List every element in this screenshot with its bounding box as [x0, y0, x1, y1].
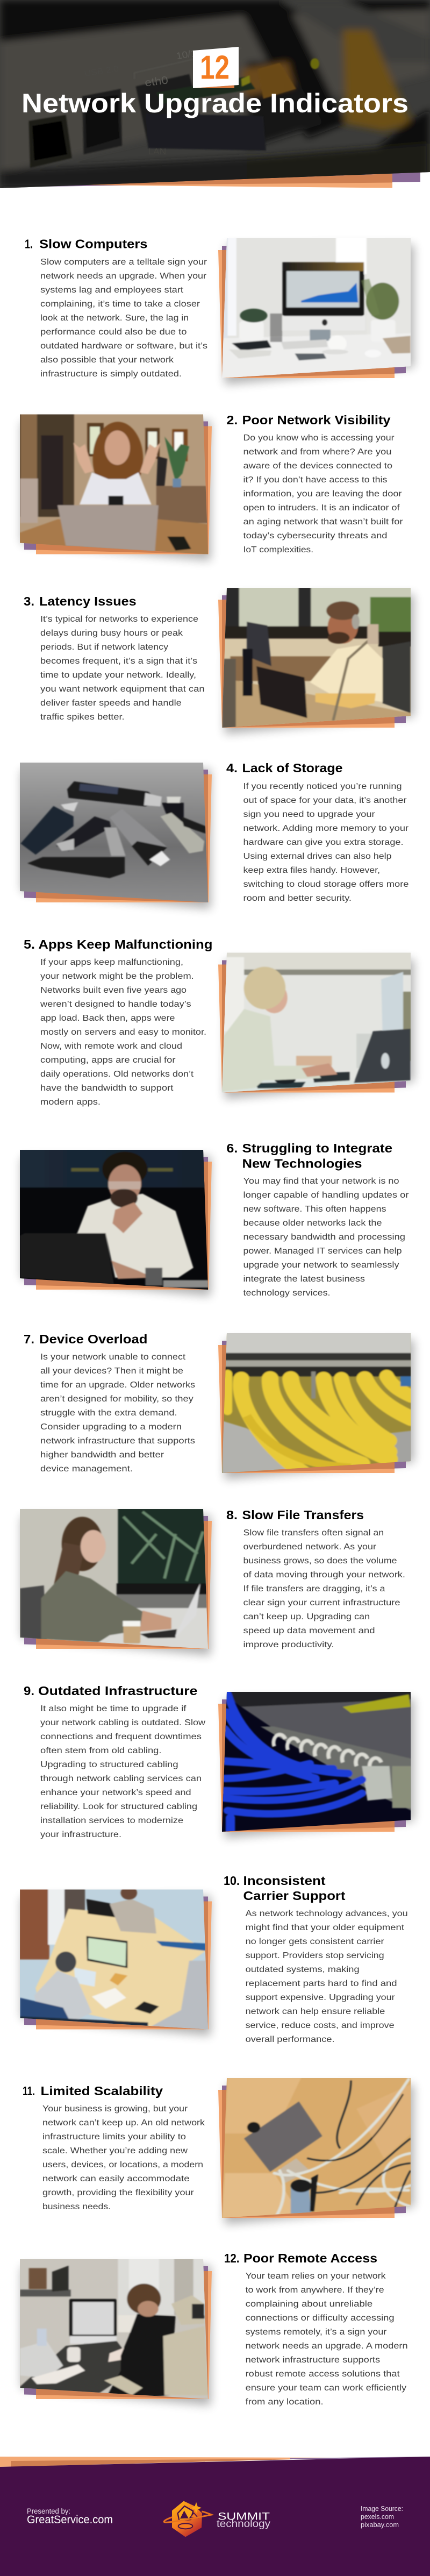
body text 12: ensure your team can work efficiently: [246, 2383, 406, 2393]
logo: Summit Technology: [164, 2501, 271, 2537]
body text 12: systems remotely, it’s a sign your: [246, 2328, 386, 2337]
body text 3: becomes frequent, it’s a sign that it’s: [40, 657, 197, 666]
body text 3: It’s typical for networks to experience: [40, 615, 198, 624]
heading 3: Latency Issues: [39, 594, 137, 608]
body text 1: Slow computers are a telltale sign your: [40, 258, 207, 267]
logo wordmark: technology: [217, 2518, 271, 2530]
section 10: Inconsistent Carrier Support: [19, 1874, 408, 2044]
body text 5: Now, with remote work and cloud: [40, 1042, 182, 1051]
heading 8: 8.: [226, 1508, 238, 1522]
body text 9: your network cabling is outdated. Slow: [40, 1718, 206, 1727]
section 4: Lack of Storage: [19, 761, 409, 909]
body text 1: complaining, it’s time to take a closer: [40, 300, 200, 309]
body text 12: Your team relies on your network: [246, 2272, 386, 2281]
body text 8: overburdened network. As your: [243, 1542, 376, 1552]
body text 10: overall performance.: [246, 2035, 335, 2044]
heading 10: Inconsistent: [243, 1874, 326, 1888]
body text 6: integrate the latest business: [243, 1275, 365, 1284]
body text 9: installation services to modernize: [40, 1816, 183, 1825]
body text 7: Is your network unable to connect: [40, 1353, 186, 1362]
number badge: 12: [200, 49, 230, 86]
image source credits: [361, 2504, 403, 2529]
image frame 8: [19, 1508, 212, 1655]
body text 4: Using external drives can also help: [243, 852, 391, 861]
body text 1: performance could also be due to: [40, 328, 187, 337]
image source credits: pexels.com: [361, 2513, 394, 2521]
heading 11: Limited Scalability: [41, 2084, 163, 2098]
heading 7: 7.: [24, 1332, 34, 1346]
body text 6: [243, 1177, 408, 1298]
body text 8: Slow file transfers often signal an: [243, 1528, 384, 1538]
heading 9: 9.: [24, 1684, 34, 1698]
image frame 6: [19, 1148, 212, 1296]
photo: blue network cables in switch: [219, 1691, 411, 1835]
section 12: Poor Remote Access: [19, 2251, 408, 2407]
body text 1: [40, 258, 207, 379]
body text 1: infrastructure is simply outdated.: [40, 369, 182, 379]
body text 9: reliability. Look for structured cabling: [40, 1802, 197, 1811]
heading 4: Lack of Storage: [242, 761, 343, 775]
heading 6: Struggling to Integrate: [242, 1141, 392, 1155]
section 1: Slow Computers: [25, 237, 414, 385]
body text 12: [246, 2272, 408, 2407]
image source credits: pixabay.com: [361, 2521, 399, 2529]
body text 1: outdated hardware or software, but it’s: [40, 341, 207, 351]
body text 10: replacement parts hard to find and: [246, 1979, 397, 1988]
body text 9: [40, 1704, 206, 1839]
body text 1: also possible that your network: [40, 355, 174, 365]
heading 12: 12.: [224, 2251, 240, 2265]
heading 12: Poor Remote Access: [243, 2251, 377, 2265]
body text 1: look at the network. Sure, the lag in: [40, 314, 189, 323]
body text 5: modern apps.: [40, 1098, 101, 1107]
body text 7: device management.: [40, 1464, 133, 1474]
image frame 2: [19, 413, 212, 560]
body text 3: delays during busy hours or peak: [40, 629, 183, 638]
section 7: Device Overload: [24, 1332, 414, 1479]
body text 6: upgrade your network to seamlessly: [243, 1261, 399, 1270]
body text 8: speed up data movement and: [243, 1626, 375, 1635]
body text 4: out of space for your data, it’s another: [243, 796, 406, 805]
body text 6: You may find that your network is no: [243, 1177, 399, 1186]
body text 8: of data moving through your network.: [243, 1570, 405, 1579]
body text 4: sign you need to upgrade your: [243, 810, 375, 819]
body text 9: your infrastructure.: [40, 1830, 121, 1839]
heading 2: 2.: [226, 413, 238, 427]
body text 11: business needs.: [42, 2202, 111, 2211]
logo wordmark: [217, 2511, 271, 2530]
body text 12: network infrastructure supports: [246, 2356, 380, 2365]
heading 11: 11.: [23, 2084, 35, 2098]
body text 11: [42, 2104, 205, 2211]
body text 3: traffic spikes better.: [40, 713, 125, 722]
photo: frustrated woman at laptop: [19, 413, 210, 555]
image frame 3: [218, 587, 414, 734]
body text 10: outdated systems, making: [246, 1965, 360, 1974]
body text 6: because older networks lack the: [243, 1219, 382, 1228]
body text 11: Your business is growing, but your: [42, 2104, 188, 2114]
body text 11: network can’t keep up. An old network: [42, 2118, 205, 2127]
body text 10: support expensive. Upgrading your: [246, 1993, 395, 2002]
body text 1: systems lag and employees start: [40, 286, 184, 295]
body text 12: connections or difficulty accessing: [246, 2314, 395, 2323]
header photo: router ports and cables: 10/1: [175, 47, 197, 61]
photo: man at iMac in home office: [19, 2258, 210, 2401]
body text 3: [40, 615, 205, 722]
heading 4: 4.: [226, 761, 238, 775]
body text 9: often stem from old cabling.: [40, 1746, 161, 1755]
body text 2: IoT complexities.: [243, 545, 313, 554]
body text 2: aware of the devices connected to: [243, 461, 392, 471]
body text 11: network can easily accommodate: [42, 2174, 189, 2183]
body text 5: If your apps keep malfunctioning,: [40, 958, 183, 967]
title: Network Upgrade Indicators: [22, 88, 408, 118]
body text 10: network can help ensure reliable: [246, 2007, 385, 2016]
heading 10: Carrier Support: [243, 1889, 346, 1903]
body text 7: higher bandwidth and better: [40, 1450, 164, 1460]
section 5: Apps Keep Malfunctioning: [24, 937, 414, 1107]
header accent bands: [43, 172, 420, 188]
presented by: [27, 2507, 113, 2526]
body text 6: new software. This often happens: [243, 1205, 386, 1214]
body text 5: your network might be the problem.: [40, 972, 194, 981]
image frame 12: [19, 2258, 212, 2406]
heading 10: [224, 1874, 346, 1903]
body text 8: clear sign your current infrastructure: [243, 1598, 400, 1607]
image frame 4: [19, 761, 212, 909]
section 3: Latency Issues: [24, 587, 414, 734]
body text 9: enhance your network’s speed and: [40, 1788, 191, 1797]
photo: desktop computer on white desk: [219, 237, 411, 380]
body text 3: deliver faster speeds and handle: [40, 699, 182, 708]
section 6: Struggling to Integrate New Technologies: [19, 1141, 409, 1298]
body text 11: infrastructure limits your ability to: [42, 2132, 186, 2141]
body text 4: network. Adding more memory to your: [243, 824, 408, 833]
body text 5: weren’t designed to handle today’s: [40, 1000, 191, 1009]
body text 12: network needs an upgrade. A modern: [246, 2342, 408, 2351]
heading 5: 5.: [24, 937, 35, 951]
presented by: Presented by:: [27, 2507, 70, 2515]
body text 12: from any location.: [246, 2397, 324, 2407]
image source credits: Image Source:: [361, 2504, 403, 2513]
photo: woman working at computer: [219, 951, 411, 1094]
body text 9: connections and frequent downtimes: [40, 1732, 202, 1741]
image frame 5: [218, 951, 414, 1099]
body text 8: If file transfers are dragging, it’s a: [243, 1584, 385, 1593]
header photo: router ports and cables: [0, 0, 430, 188]
heading 6: 6.: [226, 1141, 238, 1155]
heading 5: Apps Keep Malfunctioning: [38, 937, 212, 951]
body text 2: information, you are leaving the door: [243, 489, 402, 499]
footer accent bands: [0, 2457, 430, 2467]
photo: two colleagues working at shared desk, overhead view: [19, 1886, 210, 2031]
body text 8: improve productivity.: [243, 1640, 334, 1649]
body text 10: support. Providers stop servicing: [246, 1951, 384, 1960]
body text 9: through network cabling services can: [40, 1774, 202, 1783]
body text 11: growth, providing the flexibility your: [42, 2188, 194, 2197]
photo: yellow network cables in patch panel: [219, 1332, 411, 1475]
heading 6: [226, 1141, 392, 1170]
body text 9: Upgrading to structured cabling: [40, 1760, 178, 1769]
logo icon: [164, 2501, 211, 2537]
body text 5: Networks built even five years ago: [40, 986, 187, 995]
section 2: Poor Network Visibility: [19, 413, 403, 560]
body text 10: service, reduce costs, and improve: [246, 2021, 395, 2030]
body text 6: longer capable of handling updates or: [243, 1191, 408, 1200]
body text 5: mostly on servers and easy to monitor.: [40, 1028, 206, 1037]
body text 4: If you recently noticed you’re running: [243, 782, 402, 791]
heading 6: New Technologies: [242, 1156, 362, 1170]
header photo: router ports and cables: eth0: [144, 74, 169, 89]
body text 8: business grows, so does the volume: [243, 1556, 397, 1565]
body text 4: [243, 782, 408, 903]
footer panel: [0, 2457, 430, 2576]
body text 8: [243, 1528, 405, 1649]
image frame 11: [218, 2077, 414, 2224]
body text 6: technology services.: [243, 1289, 330, 1298]
body text 5: app load. Back then, apps were: [40, 1014, 175, 1023]
body text 2: today’s cybersecurity threats and: [243, 531, 387, 540]
section 9: Outdated Infrastructure: [24, 1684, 414, 1839]
body text 5: daily operations. Old networks don’t: [40, 1070, 194, 1079]
body text 10: As network technology advances, you: [246, 1909, 408, 1918]
body text 2: network and from where? Are you: [243, 447, 391, 457]
body text 7: struggle with the extra demand.: [40, 1408, 177, 1418]
image frame 10: [19, 1886, 212, 2036]
body text 11: scale. Whether you’re adding new: [42, 2146, 188, 2155]
body text 3: periods. But if network latency: [40, 643, 168, 652]
body text 4: room and better security.: [243, 894, 352, 903]
body text 6: necessary bandwidth and processing: [243, 1233, 405, 1242]
body text 4: keep extra files handy. However,: [243, 866, 380, 875]
body text 7: Consider upgrading to a modern: [40, 1422, 182, 1432]
presented by: GreatService.com: [27, 2514, 113, 2526]
body text 3: time to update your network. Ideally,: [40, 671, 196, 680]
header photo: router ports and cables: USB 2.0: [84, 64, 120, 79]
heading 9: Outdated Infrastructure: [38, 1684, 197, 1698]
body text 5: [40, 958, 206, 1107]
heading 1: Slow Computers: [39, 237, 147, 251]
heading 2: Poor Network Visibility: [242, 413, 390, 427]
body text 7: network infrastructure that supports: [40, 1436, 195, 1446]
heading 3: 3.: [24, 594, 34, 608]
body text 2: it? If you don’t have access to this: [243, 475, 388, 485]
body text 12: robust remote access solutions that: [246, 2369, 400, 2379]
body text 5: have the bandwidth to support: [40, 1084, 174, 1093]
body text 4: hardware can give you extra storage.: [243, 838, 403, 847]
body text 7: [40, 1353, 195, 1474]
logo wordmark: SUMMIT: [218, 2511, 270, 2522]
photo: USB flash drives: [19, 761, 210, 904]
body text 12: complaining about unreliable: [246, 2300, 372, 2309]
section 8: Slow File Transfers: [19, 1508, 405, 1655]
body text 1: network needs an upgrade. When your: [40, 272, 206, 281]
body text 9: It also might be time to upgrade if: [40, 1704, 187, 1713]
body text 2: Do you know who is accessing your: [243, 433, 395, 443]
photo: man with headphones at desk: [219, 587, 411, 730]
body text 4: switching to cloud storage offers more: [243, 880, 408, 889]
body text 3: you want network equipment that can: [40, 685, 205, 694]
image frame 1: [218, 237, 414, 385]
photo: man thinking at laptop: [19, 1148, 210, 1291]
photo: network switch with cables on wood floor: [219, 2077, 411, 2220]
body text 10: no longer gets consistent carrier: [246, 1937, 384, 1946]
body text 6: power. Managed IT services can help: [243, 1247, 402, 1256]
body text 12: to work from anywhere. If they’re: [246, 2286, 384, 2295]
body text 10: [246, 1909, 408, 2044]
body text 5: computing, apps are crucial for: [40, 1056, 175, 1065]
heading 10: 10.: [224, 1874, 240, 1888]
image frame 9: [218, 1691, 414, 1838]
body text 8: can’t keep up. Upgrading can: [243, 1612, 370, 1621]
section 11: Limited Scalability: [23, 2077, 414, 2224]
image frame 7: [218, 1332, 414, 1479]
body text 2: open to intruders. It is an indicator of: [243, 503, 400, 513]
body text 11: users, devices, or locations, a modern: [42, 2160, 203, 2169]
heading 7: Device Overload: [39, 1332, 147, 1346]
body text 2: [243, 433, 403, 554]
body text 7: time for an upgrade. Older networks: [40, 1380, 195, 1390]
body text 10: might find that your older equipment: [246, 1923, 405, 1932]
header photo: router ports and cables: LAN: [148, 147, 166, 156]
body text 7: all your devices? Then it might be: [40, 1367, 183, 1376]
body text 7: aren’t designed for mobility, so they: [40, 1394, 194, 1404]
photo: woman typing on laptop with plants: [19, 1508, 210, 1652]
heading 1: 1.: [25, 237, 33, 251]
heading 8: Slow File Transfers: [242, 1508, 364, 1522]
body text 2: an aging network that wasn’t built for: [243, 517, 403, 526]
